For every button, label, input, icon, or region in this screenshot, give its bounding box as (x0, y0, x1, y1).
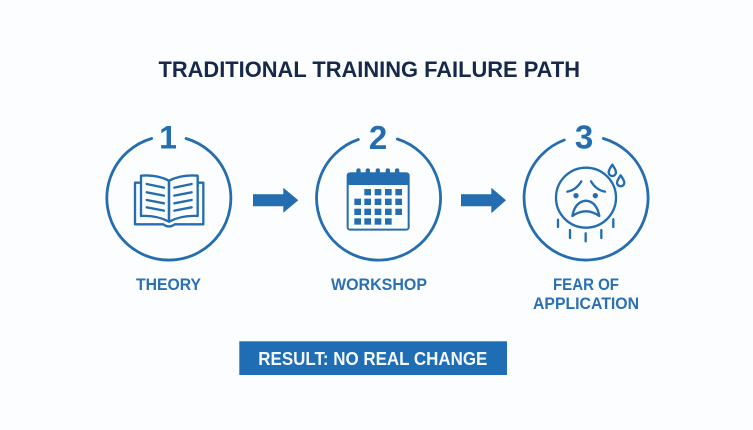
result banner: RESULT: NO REAL CHANGE (258, 349, 487, 369)
circle ring 1 (107, 138, 231, 260)
result banner (239, 341, 507, 375)
panel: step 1 theory (107, 120, 231, 294)
icon: calendar (347, 168, 409, 230)
arrow 2 (461, 188, 506, 213)
icon: worried sweating face (556, 165, 624, 241)
circle ring 2 (317, 139, 441, 260)
step number 1: 1 (159, 120, 177, 156)
icon: open book (135, 175, 203, 226)
label: fear of application: APPLICATION (533, 295, 639, 313)
step number 3: 3 (575, 118, 593, 156)
circle ring 3 (524, 138, 648, 260)
label: fear of application (533, 276, 639, 313)
label: theory: THEORY (136, 276, 201, 294)
title: TRADITIONAL TRAINING FAILURE PATH (158, 57, 580, 82)
label: fear of application: FEAR OF (553, 276, 619, 294)
arrow 1 (253, 188, 298, 213)
label: workshop: WORKSHOP (331, 276, 427, 294)
panel: step 2 workshop (317, 119, 441, 294)
step number 2: 2 (369, 119, 387, 156)
panel: step 3 fear of application (524, 118, 648, 313)
